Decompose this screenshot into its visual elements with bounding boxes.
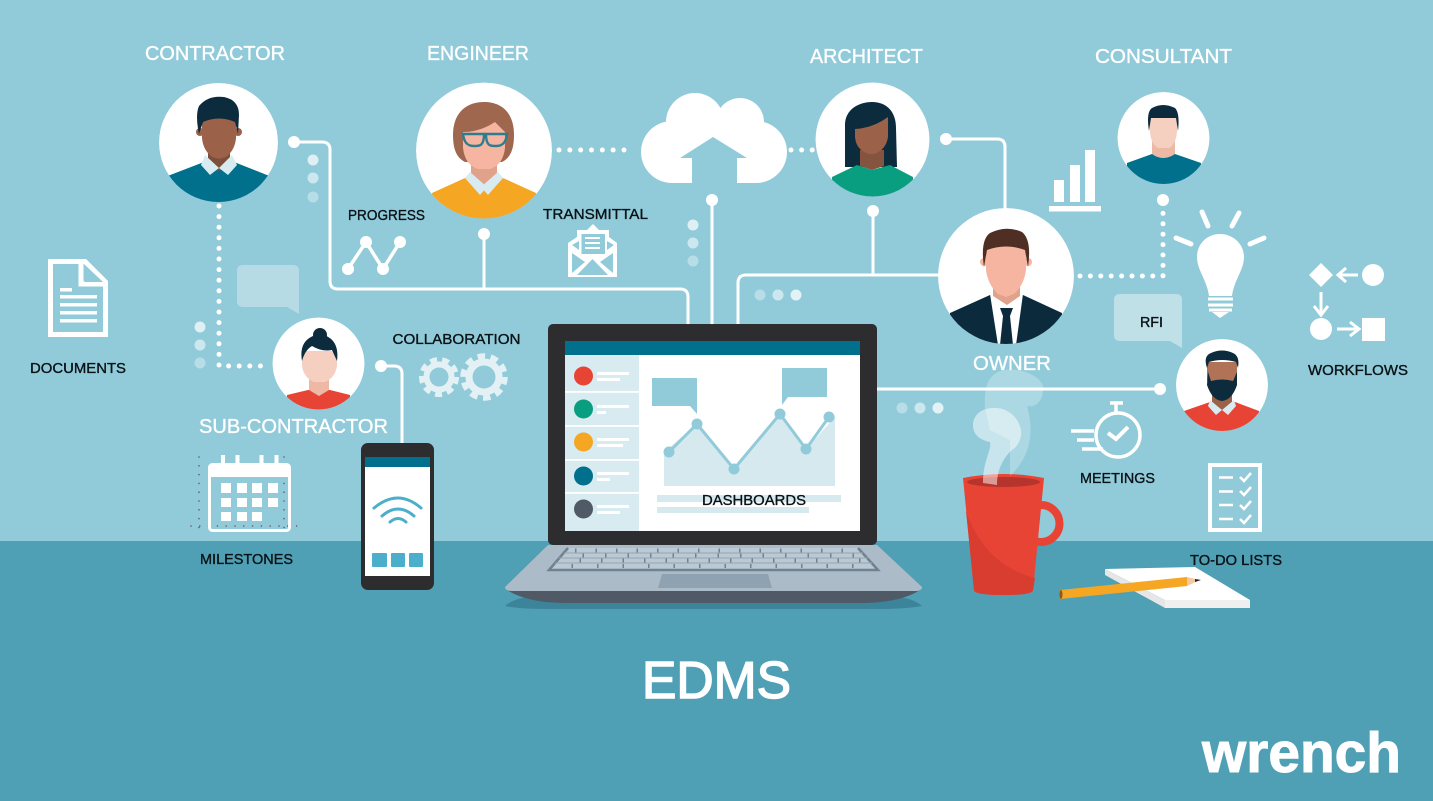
icon: bar chart [1049, 150, 1101, 212]
coffee mug [963, 370, 1060, 595]
icon: wifi [374, 498, 421, 522]
icon: workflows diagram [1309, 263, 1385, 341]
person: contractor [159, 83, 278, 210]
person: sub-contractor [272, 318, 364, 415]
fading dot groups [194, 154, 944, 414]
labels [30, 43, 1408, 569]
network connector lines [288, 133, 1169, 443]
icon: progress line [342, 236, 406, 275]
label: contractor: CONTRACTOR [145, 43, 285, 65]
icon: to-do list [1210, 465, 1260, 530]
label: to-do lists: TO-DO LISTS [1190, 553, 1282, 569]
desk [0, 541, 1433, 801]
dashboard line chart [652, 368, 835, 486]
label: dashboards: DASHBOARDS [702, 493, 806, 509]
label: progress: PROGRESS [348, 208, 425, 224]
person: reviewer with beard [1176, 339, 1268, 435]
icon: speech bubble RFI [1114, 294, 1182, 348]
label: owner: OWNER [973, 353, 1051, 375]
label: architect: ARCHITECT [810, 46, 923, 68]
notepad and pencil [1060, 567, 1250, 608]
icon: gears [422, 356, 505, 398]
background wall [0, 0, 1433, 542]
icon: cloud upload [641, 93, 787, 184]
label: engineer: ENGINEER [427, 43, 529, 65]
icon: light bulb [1176, 212, 1264, 318]
label: collaboration: COLLABORATION [392, 332, 520, 348]
label: sub-contractor: SUB-CONTRACTOR [199, 416, 388, 438]
person: architect [816, 82, 930, 200]
person: owner [938, 208, 1074, 350]
person: engineer [416, 82, 552, 225]
title: EDMS [642, 652, 791, 710]
icon: speech bubble collaboration [237, 265, 299, 314]
keyboard [549, 548, 878, 570]
icon: stopwatch [1071, 403, 1140, 457]
label: workflows: WORKFLOWS [1308, 363, 1408, 379]
person: consultant [1118, 92, 1210, 190]
label: meetings: MEETINGS [1080, 471, 1155, 487]
label: milestones: MILESTONES [200, 552, 293, 568]
phone [361, 443, 434, 590]
icon: milestones calendar [191, 455, 302, 535]
label: transmittal: TRANSMITTAL [543, 207, 648, 223]
label: consultant: CONSULTANT [1095, 46, 1232, 68]
laptop screen dashboard [565, 341, 860, 531]
dotted connector lines [219, 150, 1163, 366]
icon: transmittal envelope [568, 224, 617, 277]
label: documents: DOCUMENTS [30, 361, 126, 377]
steam [973, 370, 1043, 485]
laptop [505, 324, 922, 609]
icon: document [50, 262, 106, 334]
logo: wrench: wrench [1201, 721, 1401, 785]
label: RFI: RFI [1140, 315, 1163, 331]
